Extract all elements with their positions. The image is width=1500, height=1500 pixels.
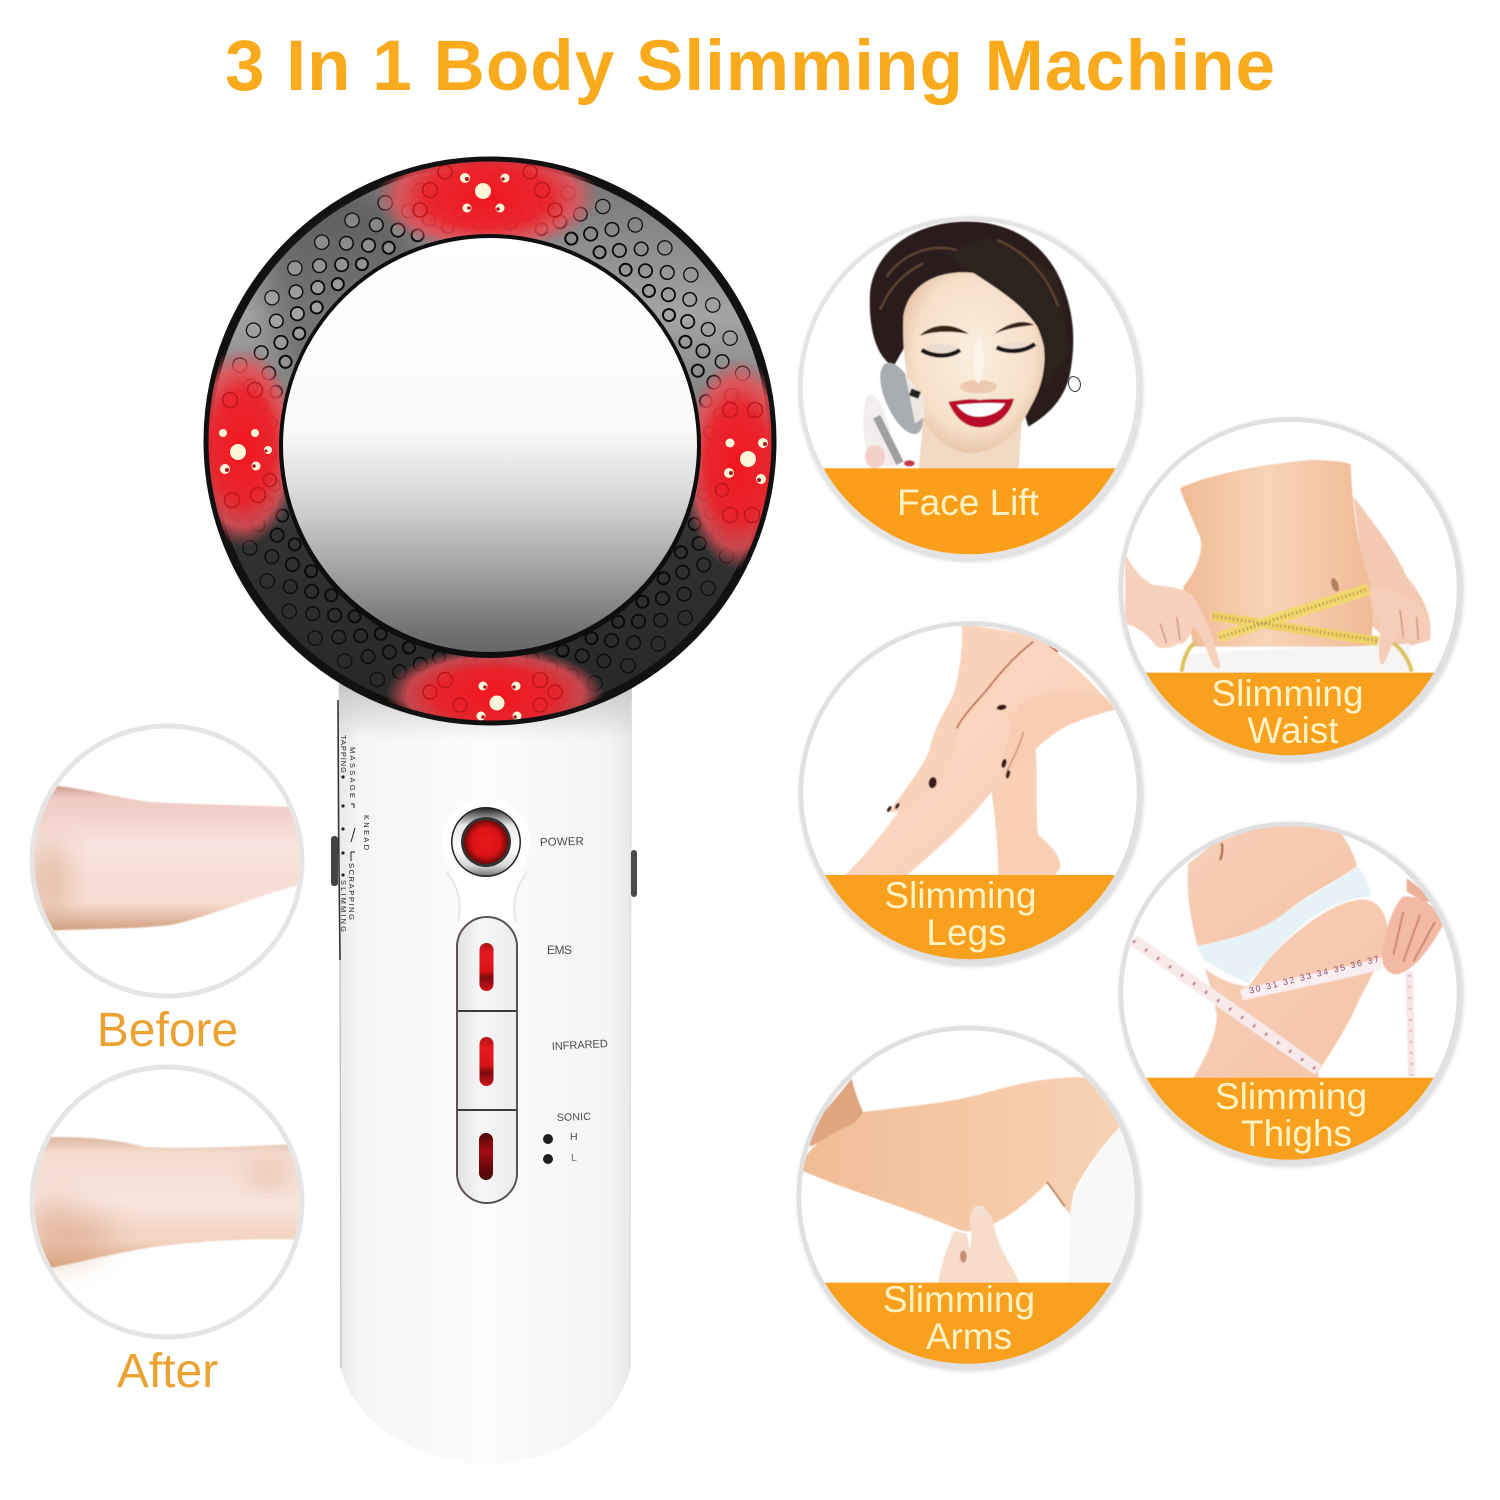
tape numbers: 30 31 32 33 34 35 36 37 — [1248, 954, 1380, 996]
mirror plate — [279, 234, 701, 658]
red LED glow areas — [208, 162, 772, 720]
slimming legs label: Legs — [926, 912, 1007, 953]
power button — [442, 798, 530, 922]
control labels: POWER — [540, 836, 584, 849]
ring head — [204, 156, 776, 726]
control labels: H — [570, 1131, 578, 1143]
control labels: INFRARED — [552, 1038, 608, 1053]
control button strip — [457, 917, 517, 1203]
massage dots — [228, 181, 752, 705]
title: 3 In 1 Body Slimming Machine — [225, 27, 1275, 106]
slimming waist label: Slimming — [1211, 673, 1364, 714]
red dot outlines — [222, 165, 762, 712]
face lift label: Face Lift — [897, 482, 1040, 523]
before label: Before — [97, 1004, 238, 1057]
panel: after — [25, 1067, 310, 1398]
side switch labels: SCRAPPING — [347, 863, 356, 920]
slimming legs label: Slimming — [884, 875, 1037, 916]
panel: slimming waist — [1110, 419, 1470, 773]
slimming arms label: Arms — [926, 1316, 1012, 1357]
device handle — [331, 660, 637, 1464]
side switch labels: KNEAD — [362, 815, 371, 851]
device: body slimming machine — [187, 141, 794, 1464]
after arm photo — [25, 1137, 310, 1268]
slimming arms label: Slimming — [883, 1279, 1035, 1320]
control labels: SONIC — [557, 1111, 591, 1124]
arms photo — [801, 1030, 1120, 1364]
slimming thighs label: Thighs — [1241, 1113, 1352, 1154]
thighs photo — [1123, 826, 1443, 1160]
panel: face lift — [790, 218, 1150, 568]
control labels — [540, 836, 608, 1164]
slimming waist label: Waist — [1247, 710, 1339, 751]
panel: slimming arms — [790, 1028, 1150, 1383]
slimming thighs label: Slimming — [1215, 1076, 1367, 1117]
before arm photo — [25, 786, 310, 932]
panel: slimming legs — [790, 623, 1150, 975]
control labels: EMS — [547, 943, 572, 957]
waist photo — [1123, 422, 1434, 756]
side switch labels: MASSAGE — [348, 747, 357, 798]
side switch labels: SLIMMING — [339, 880, 348, 932]
panel: before — [25, 726, 310, 1057]
panel: slimming thighs — [1110, 824, 1470, 1178]
side switch labels: TAPPING — [339, 735, 348, 773]
legs photo — [803, 626, 1115, 960]
after label: After — [117, 1345, 218, 1398]
face photo — [802, 221, 1116, 554]
LED points — [219, 173, 768, 720]
control labels: L — [571, 1152, 577, 1164]
side switch labels — [339, 735, 371, 932]
